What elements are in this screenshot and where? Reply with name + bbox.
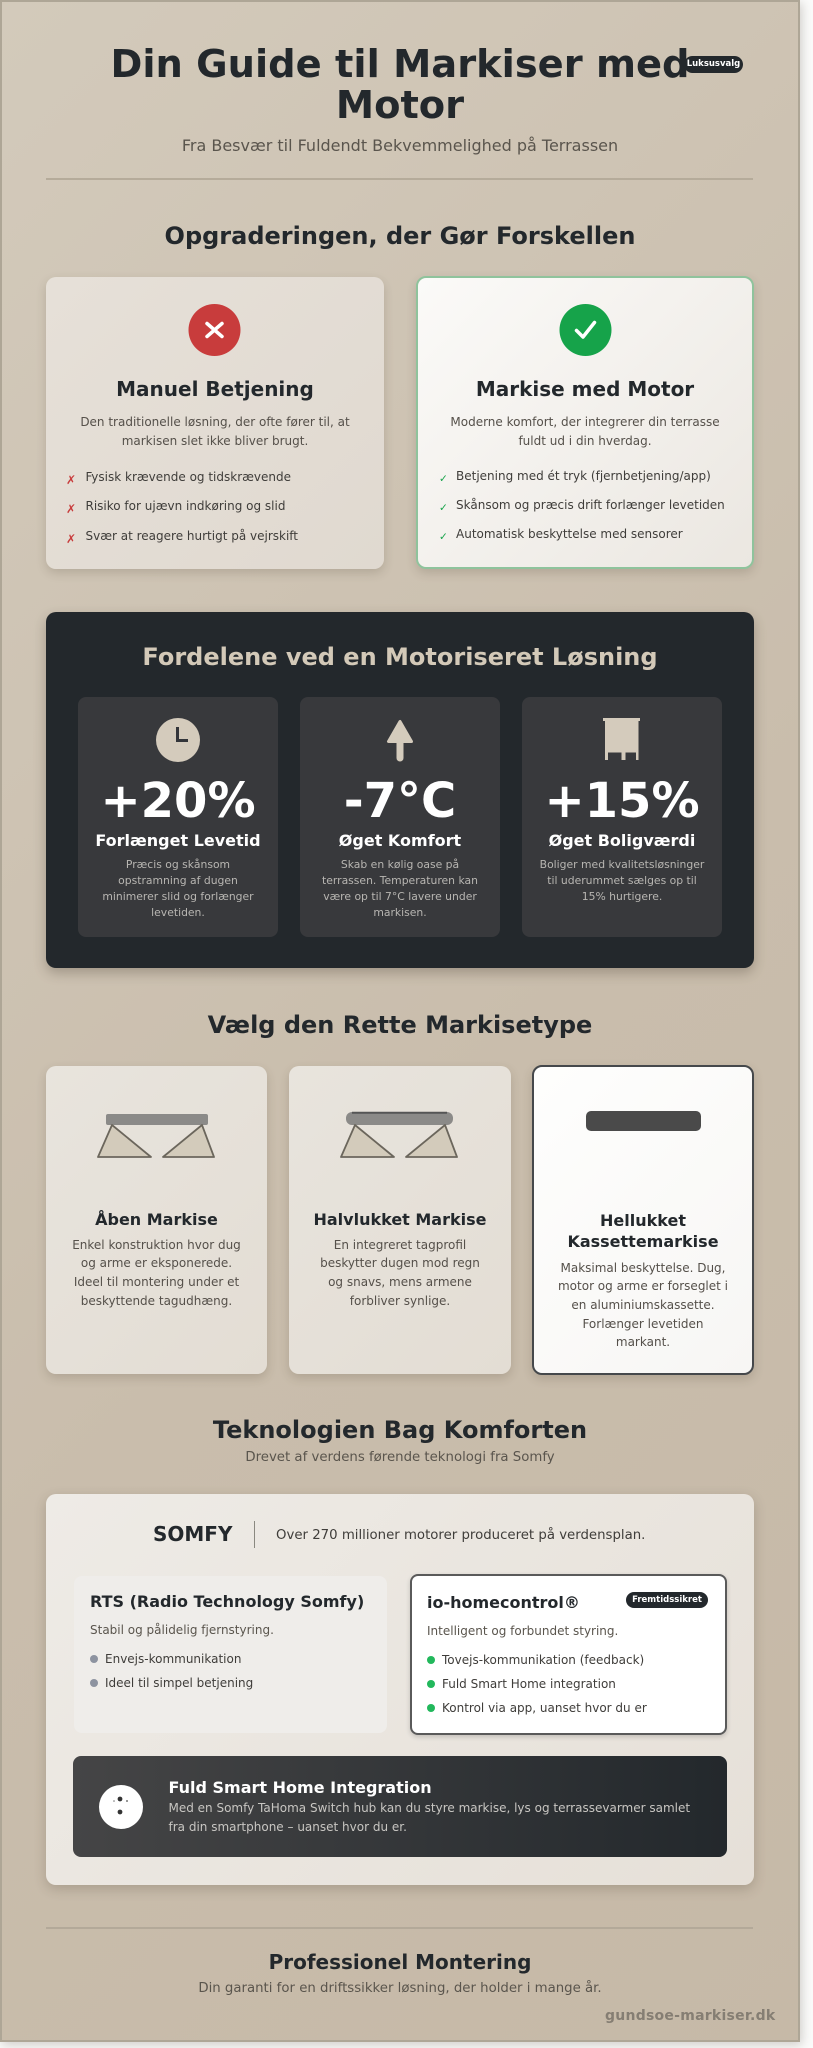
value: +15%: [544, 773, 700, 829]
RTS list: [90, 1652, 253, 1690]
panel: halvlukket markise: [289, 1066, 511, 1374]
list: drawbacks: ✗: [66, 502, 76, 516]
card description: [80, 415, 350, 448]
icon: clock: [156, 718, 200, 762]
badge: Luksusvalg: [684, 56, 743, 73]
type description: [72, 1238, 241, 1308]
card heading: Manuel Betjening: [116, 377, 314, 401]
badge: Luksusvalg: Luksusvalg: [687, 59, 740, 69]
type description: og snavs, mens armene: [328, 1275, 472, 1289]
io list: [427, 1653, 647, 1715]
stat card: komfort: [300, 697, 500, 937]
io description: Intelligent og forbundet styring.: [427, 1624, 618, 1638]
icon: house: [603, 718, 640, 760]
website credit: gundsoe-markiser.dk: [605, 2008, 775, 2024]
list: drawbacks: Svær at reagere hurtigt på vejrskift: [86, 529, 298, 543]
somfy logo text: SOMFY: [153, 1522, 232, 1546]
type description: forbliver synlige.: [350, 1294, 450, 1308]
RTS description: Stabil og pålidelig fjernstyring.: [90, 1623, 274, 1637]
subtitle: Fra Besvær til Fuldendt Bekvemmelighed på Terrassen: [182, 136, 618, 155]
description: Præcis og skånsom: [126, 858, 230, 871]
card: RTS: [74, 1576, 387, 1733]
description: [540, 858, 704, 903]
icon: tree/parasol: [386, 720, 413, 762]
list: benefits: Automatisk beskyttelse med sensorer: [456, 527, 683, 541]
description: 15% hurtigere.: [582, 890, 662, 903]
callout description: [168, 1801, 690, 1834]
type title: [567, 1211, 719, 1251]
heading: teknologi: Teknologien Bag Komforten: [213, 1416, 587, 1444]
list: drawbacks: [66, 470, 298, 546]
callout description: fra din smartphone – uanset hvor du er.: [168, 1820, 407, 1834]
description: levetiden.: [151, 906, 205, 919]
list: benefits: ✓: [439, 473, 448, 485]
io list: Kontrol via app, uanset hvor du er: [442, 1701, 647, 1715]
icon: semi-closed awning: [340, 1112, 458, 1158]
card description: markisen slet ikke bliver brugt.: [122, 434, 308, 448]
panel: åben markise: [46, 1066, 267, 1374]
io title: io-homecontrol®: [427, 1593, 580, 1612]
type description: En integreret tagprofil: [334, 1238, 466, 1252]
type description: og arme er eksponerede.: [81, 1256, 232, 1270]
value: -7°C: [344, 773, 456, 829]
icon: red cross: [188, 304, 240, 356]
value: +20%: [100, 773, 256, 829]
card heading: Markise med Motor: [476, 377, 694, 401]
label: Øget Boligværdi: [549, 831, 695, 850]
heading: montering: Professionel Montering: [269, 1950, 531, 1974]
card description: fuldt ud i din hverdag.: [518, 434, 652, 448]
type description: beskytter dugen mod regn: [320, 1256, 480, 1270]
list: drawbacks: Risiko for ujævn indkøring og slid: [86, 499, 285, 513]
somfy statement: Over 270 millioner motorer produceret på verdensplan.: [276, 1528, 645, 1543]
list: benefits: [439, 469, 725, 543]
list: benefits: Betjening med ét tryk (fjernbetjening/app): [456, 469, 711, 483]
type description: motor og arme er forseglet i: [558, 1279, 728, 1293]
type title: Halvlukket Markise: [313, 1210, 486, 1229]
type title: Kassettemarkise: [567, 1232, 719, 1251]
type title: Åben Markise: [95, 1210, 218, 1229]
badge: Fremtidssikret: [626, 1592, 708, 1608]
panel: somfy: [46, 1494, 754, 1885]
heading: Opgraderingen: Opgraderingen, der Gør Forskellen: [165, 222, 635, 250]
panel: fordele: [46, 612, 754, 968]
RTS list: Ideel til simpel betjening: [105, 1676, 253, 1690]
io list: Fuld Smart Home integration: [442, 1677, 616, 1691]
stat card: levetid: [78, 697, 278, 937]
type description: en aluminiumskassette.: [571, 1298, 715, 1312]
subheading: montering: Din garanti for en driftssikker løsning, der holder i mange år.: [198, 1981, 602, 1996]
heading: markisetype: Vælg den Rette Markisetype: [208, 1011, 592, 1039]
description: [102, 858, 254, 919]
icon: open awning: [97, 1114, 215, 1158]
list: drawbacks: Fysisk krævende og tidskrævende: [86, 470, 291, 484]
description: terrassen. Temperaturen kan: [322, 874, 478, 887]
list: benefits: Skånsom og præcis drift forlænger levetiden: [456, 498, 725, 512]
description: til uderummet sælges op til: [547, 874, 697, 887]
subheading: teknologi: Drevet af verdens førende teknologi fra Somfy: [245, 1450, 555, 1465]
panel heading: Fordelene ved en Motoriseret Løsning: [142, 643, 658, 671]
card description: Moderne komfort, der integrerer din terrasse: [450, 415, 720, 429]
icon: hub: [99, 1785, 143, 1829]
list: drawbacks: ✗: [66, 473, 76, 487]
callout title: Fuld Smart Home Integration: [168, 1778, 432, 1797]
type description: beskyttende tagudhæng.: [81, 1294, 232, 1308]
card: io-homecontrol: [410, 1574, 727, 1735]
type description: Maksimal beskyttelse. Dug,: [560, 1260, 725, 1274]
badge: Fremtidssikret: Fremtidssikret: [632, 1595, 702, 1605]
callout description: Med en Somfy TaHoma Switch hub kan du styre markise, lys og terrassevarmer samlet: [168, 1801, 690, 1815]
description: minimerer slid og forlænger: [102, 890, 254, 903]
icon: green check: [560, 304, 612, 356]
description: være op til 7°C lavere under: [323, 890, 477, 903]
panel: manuel betjening: [46, 277, 384, 569]
RTS title: RTS (Radio Technology Somfy): [90, 1592, 364, 1611]
label: Øget Komfort: [339, 831, 461, 850]
list: drawbacks: ✗: [66, 532, 76, 546]
description: markisen.: [373, 906, 427, 919]
type description: Ideel til montering under et: [74, 1275, 239, 1289]
type description: Enkel konstruktion hvor dug: [72, 1238, 241, 1252]
panel: hellukket kassettemarkise: [532, 1065, 754, 1375]
type description: [558, 1260, 728, 1349]
label: Forlænget Levetid: [95, 831, 261, 850]
stat card: boligværdi: [522, 697, 722, 937]
type description: Forlænger levetiden: [582, 1317, 704, 1331]
callout: smart home: [73, 1756, 727, 1857]
description: Boliger med kvalitetsløsninger: [540, 858, 704, 871]
title: [110, 42, 690, 128]
description: Skab en kølig oase på: [341, 858, 459, 871]
description: opstramning af dugen: [118, 874, 238, 887]
io list: Tovejs-kommunikation (feedback): [442, 1653, 644, 1667]
card description: Den traditionelle løsning, der ofte fører til, at: [80, 415, 350, 429]
description: [322, 858, 478, 919]
type description: [320, 1238, 480, 1308]
card description: [450, 415, 720, 448]
icon: cassette: [586, 1111, 701, 1131]
title: Din Guide til Markiser med: [110, 42, 690, 87]
list: benefits: ✓: [439, 531, 448, 543]
type description: markant.: [616, 1335, 670, 1349]
panel: markise med motor: [416, 276, 754, 569]
type title: Hellukket: [600, 1211, 686, 1230]
RTS list: Envejs-kommunikation: [105, 1652, 241, 1666]
title: Motor: [336, 83, 464, 128]
list: benefits: ✓: [439, 502, 448, 514]
